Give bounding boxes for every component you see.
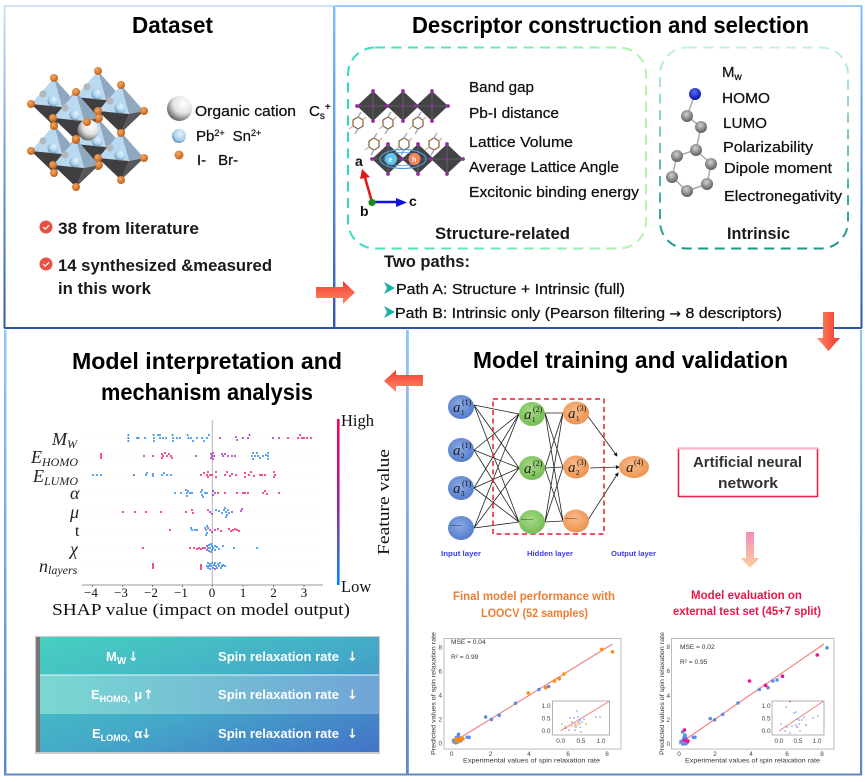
table: descriptor effect on spin relaxation rate [35,636,380,754]
chart: external test set evaluation: Predicted values of spin relaxation rate [659,632,666,755]
chart: LOOCV performance: 0 [438,740,442,748]
x-axis tick labels: −4 [84,585,98,600]
inset: 1.0 [597,738,606,745]
row 3 [92,726,358,743]
chart title: Final model performance with [453,591,615,603]
inset: 0.0 [542,728,551,735]
text: dataset bullets: 14 synthesized &measured [58,256,272,275]
icon: layered perovskite with exciton: h [412,157,416,164]
y-axis feature labels: W [67,437,78,451]
x-axis tick labels [84,585,307,600]
chart: external test set evaluation: MSE = 0.02 [680,644,715,651]
chart: LOOCV performance: Experimental values of spin relaxation rate [463,758,600,764]
inset: 0.5 [794,738,803,745]
y-axis feature labels [30,429,80,577]
chart title [453,591,615,620]
y-axis feature labels: α [70,483,80,503]
legend: ions: 2+ [251,128,261,138]
row 2: , [128,694,130,704]
row 1: M [106,649,117,664]
box: intrinsic descriptors [660,48,848,248]
chart: LOOCV performance: 4 [527,751,531,758]
row 3: ↓ [347,727,358,742]
input layer nodes: (1) [462,441,472,450]
hidden layer frame [493,399,604,534]
chart: external test set evaluation: 0 [666,741,670,748]
chart: external test set evaluation: 8 [820,751,824,758]
legend: ions: + [325,102,331,113]
chart: external test set evaluation [659,590,834,764]
colour bar: feature value [337,411,393,596]
arrow: descriptors to training [817,312,840,351]
inset: 0.0 [556,738,566,745]
row 2 [91,687,358,704]
panel: model training and validation [406,330,862,775]
chart: external test set evaluation: Experimental values of spin relaxation rate [685,758,820,764]
y-axis feature labels: t [75,523,80,540]
panel: model interpretation and mechanism analysis [4,330,408,775]
row 2: ↓ [347,688,358,703]
arrow: training to interpretation [384,370,423,392]
colour bar: feature value: Feature value [374,449,393,555]
chart: external test set evaluation: 2 [666,717,670,724]
text: intrinsic descriptor list: HOMO [722,90,770,107]
hidden layer 3 nodes: ...... [565,512,577,521]
y-axis feature labels: χ [68,539,79,559]
row 3: ↓ [141,727,152,742]
chart: external test set evaluation: 0 [677,751,681,758]
hidden layer 2 nodes: (2) [533,459,543,468]
chart: external test set evaluation: 6 [785,751,789,758]
colour bar: feature value: Low [341,577,371,596]
text: structure descriptor list: Band gap [469,79,534,96]
chart title: external test set (45+7 split) [673,606,821,618]
legend: ions [167,96,331,169]
chart: LOOCV performance: MSE = 0.04 [451,639,486,646]
output node: a [626,460,634,476]
heading: model interpretation [72,348,342,405]
chart: external test set evaluation: 8 [666,644,670,651]
hidden layer 3 nodes: (3) [577,458,587,467]
hidden layer 3 nodes: a [568,460,576,476]
inset: 1.0 [762,703,771,710]
hidden layer 2 nodes: ...... [521,513,533,522]
diagram: neural network [441,395,656,558]
row 3: α [134,726,142,741]
input layer nodes: (1) [462,479,472,488]
layer labels: Input layer [441,549,481,558]
box: structure-related descriptors [348,48,646,248]
chart: LOOCV performance: 6 [566,751,570,758]
text: two paths: Path A: Structure + Intrinsic (full) [396,281,625,298]
icon: layered perovskite with exciton: e [388,157,392,164]
heading: model interpretation: Model interpretation and [72,348,342,374]
y-axis feature labels: HOMO [41,455,78,469]
legend: ions: 2+ [214,128,225,138]
input layer nodes: 1 [461,409,465,417]
inset: 0.0 [762,728,771,735]
text: intrinsic descriptor list: LUMO [723,115,767,132]
dots: mid feature values [134,435,279,550]
text: two paths [384,252,782,322]
input layer nodes: a [453,400,460,416]
chart: LOOCV performance: 8 [605,751,609,758]
chart: external test set evaluation: 6 [666,668,670,675]
inset: 1.0 [813,738,822,745]
x-axis tick labels: 3 [301,585,307,600]
layer labels: Hidden layer [527,549,573,558]
x-axis tick labels: −1 [174,585,188,600]
output node: (4) [634,458,644,467]
text: two paths: Two paths: [384,252,470,271]
hidden layer 3 nodes: (3) [577,404,587,413]
hidden layer 2 nodes: a [524,407,532,423]
row 1: ↓ [128,650,139,665]
arrow: dataset to descriptors [316,281,355,304]
text: dataset bullets [40,219,272,298]
connections [474,405,563,528]
text: structure descriptor list: Lattice Volume [469,134,573,151]
hidden layer 3 nodes: 2 [576,469,580,477]
input layer nodes [448,395,474,540]
row 3: LOMO [101,733,128,743]
hidden layer 2 nodes [519,402,545,534]
y-axis feature labels: M [52,429,67,449]
hidden layer 2 nodes: 2 [532,470,536,478]
chart: LOOCV performance: 2 [489,751,493,758]
text: dataset bullets: in this work [58,279,152,298]
hidden layer 3 nodes [563,402,589,532]
heading: dataset: Dataset [132,12,213,38]
row 1: Spin relaxation rate [218,649,339,664]
hidden layer 2 nodes: a [524,461,532,477]
inset: 1.0 [542,703,551,710]
input layer nodes: ...... [450,519,462,528]
inset [542,701,610,745]
heading: descriptor: Descriptor construction and selection [412,12,809,38]
hidden layer 3 nodes: 1 [576,415,580,423]
icon: perovskite crystal structure [27,67,148,191]
chart: external test set evaluation: 2 [713,751,717,758]
text: intrinsic descriptor list: w [734,72,742,83]
input layer nodes: (1) [462,398,472,407]
x-axis tick labels: −3 [114,585,128,600]
dots: low feature values [93,435,268,569]
heading: model training: Model training and validation [473,347,788,373]
x-axis tick labels: −2 [144,585,158,600]
input layer nodes: a [453,481,460,497]
x-axis tick labels: 0 [209,585,215,600]
row 3: Spin relaxation rate [218,726,339,741]
icon: layered perovskite with exciton [349,89,465,176]
y-axis feature labels: n [39,556,48,576]
layer labels [441,549,656,558]
y-axis feature labels: E [31,447,42,467]
inset: 0.5 [762,716,771,722]
row 2: Spin relaxation rate [218,687,339,702]
inset [762,701,824,745]
arrow: network to evaluation [741,532,760,568]
hidden layer 2 nodes: (2) [533,405,543,414]
inset: 0.0 [775,738,784,745]
x-axis tick labels: 1 [240,585,246,600]
chart title: LOOCV (52 samples) [481,608,588,620]
inset: 0.5 [577,738,586,745]
callout: artificial neural network: network [718,475,779,492]
chart: LOOCV performance: 0 [450,751,454,758]
y-axis feature labels: μ [69,502,79,522]
chart: LOOCV performance [430,591,621,764]
text: intrinsic descriptor list: Electronegativity [724,188,843,205]
text: intrinsic descriptor list: Polarizability [723,139,814,156]
icon: lattice axes: c [409,193,417,209]
layer labels: Output layer [611,549,656,558]
text: intrinsic descriptor list: M [722,64,734,81]
chart: LOOCV performance: 4 [438,692,442,700]
colour bar: feature value: High [341,411,375,430]
row 1: W [117,656,127,667]
hidden layer 3 nodes: a [568,406,576,422]
input layer nodes: a [453,443,460,459]
icon: lattice axes: b [360,203,369,219]
text: intrinsic descriptor list: Dipole moment [724,160,833,177]
y-axis feature labels: layers [48,563,78,577]
row 2: HOMO [100,694,128,704]
row 3: , [128,733,130,743]
chart: external test set evaluation: 4 [749,751,753,758]
dots: high feature values [101,435,311,569]
legend: ions: s [320,111,325,122]
legend: ions: C [309,103,320,120]
panel: descriptor construction and selection [334,6,862,328]
chart: LOOCV performance: 2 [438,716,442,724]
text: two paths: Path B: Intrinsic only (Pearson filtering → 8 descriptors) [395,305,782,322]
legend: ions: Pb [196,128,214,145]
text: intrinsic descriptor list [722,64,843,205]
input layer nodes: 3 [461,490,465,498]
row 1 [106,649,358,667]
callout: artificial neural network: Artificial neural [693,454,802,471]
y-axis feature labels: LUMO [43,474,78,488]
row 2: E [91,687,100,702]
text: structure descriptor list: Pb-I distance [469,105,559,122]
output node [619,456,649,478]
x-axis title: SHAP value (impact on model output) [52,600,350,619]
legend: ions: I- Br- [197,152,238,169]
inset: 0.5 [542,716,551,722]
input layer nodes: 2 [461,452,465,460]
chart: LOOCV performance: R² = 0.99 [451,654,479,661]
legend: ions: Organic cation [195,103,296,120]
row 2: ↑ [143,688,154,703]
x-axis tick labels: 2 [270,585,277,600]
chart: external test set evaluation: R² = 0.95 [680,659,708,666]
hidden layer 2 nodes: 1 [532,416,536,424]
y-axis feature labels: E [33,466,44,486]
row 3: E [92,726,101,741]
label: structure-related: Structure-related [435,224,570,243]
chart: external test set evaluation: 4 [666,693,670,700]
callout: artificial neural network [678,448,818,496]
text: structure descriptor list: Excitonic binding energy [469,184,640,201]
chart: LOOCV performance: Predicted values of spin relaxation rate [430,632,438,755]
label: intrinsic: Intrinsic [727,224,790,243]
chart: SHAP beeswarm [30,411,393,619]
chart title [673,590,821,618]
panel: dataset [4,6,335,328]
row 1: ↓ [347,650,358,665]
chart title: Model evaluation on [691,590,802,602]
text: structure descriptor list [469,79,640,201]
icon: molecule [666,88,717,197]
icon: lattice axes: a [355,153,363,169]
legend: ions: Sn [233,128,251,145]
text: dataset bullets: 38 from literature [58,219,199,238]
chart: LOOCV performance: 6 [438,668,442,676]
icon: lattice axes [355,153,417,219]
chart: LOOCV performance: 8 [438,644,442,652]
text: structure descriptor list: Average Lattice Angle [469,159,619,176]
row 2: μ [134,687,142,702]
heading: model interpretation: mechanism analysis [101,379,313,405]
